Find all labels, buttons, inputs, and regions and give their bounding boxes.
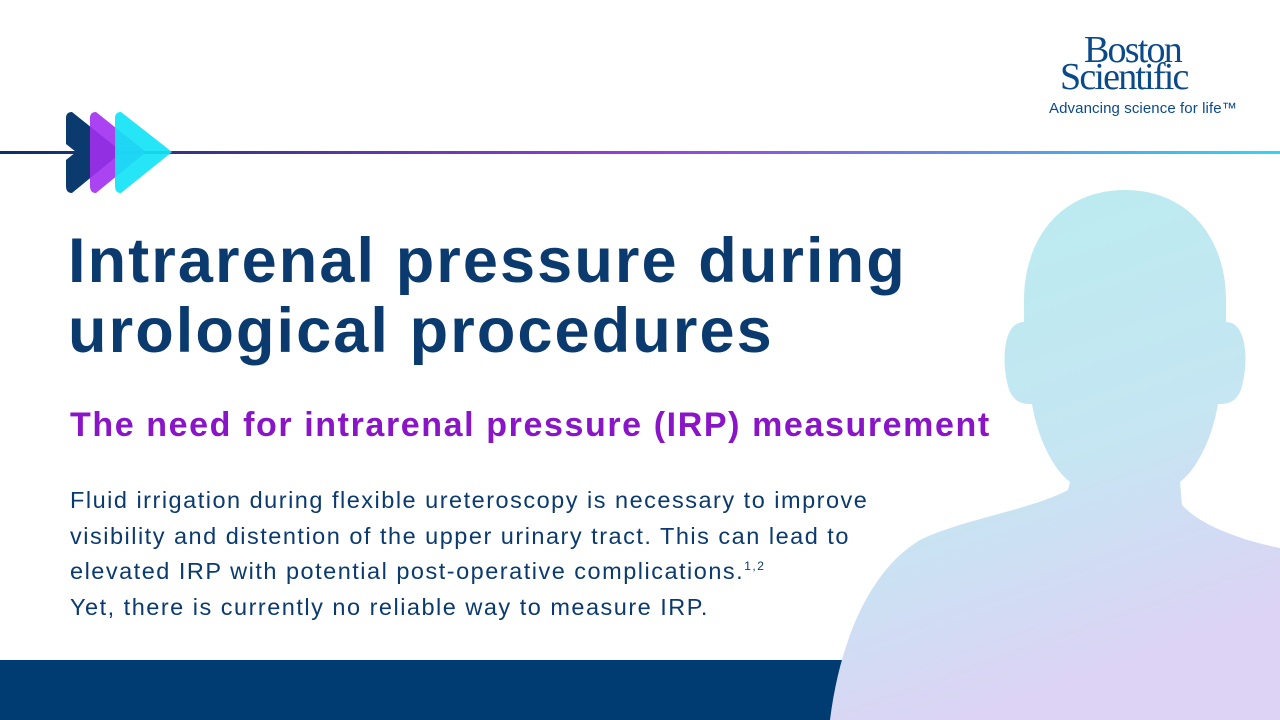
title: Intrarenal pressure during [68, 226, 907, 296]
body text: visibility and distention of the upper urinary tract. This can lead to [70, 522, 850, 548]
title [68, 226, 907, 366]
body text: Fluid irrigation during flexible ureteroscopy is necessary to improve [70, 487, 868, 513]
logo: Advancing science for life™ [1049, 100, 1237, 117]
body text [70, 487, 868, 620]
subtitle: The need for intrarenal pressure (IRP) measurement [70, 406, 991, 444]
title: urological procedures [68, 296, 774, 366]
body text: Yet, there is currently no reliable way to measure IRP. [70, 594, 709, 620]
logo [1049, 29, 1237, 117]
logo: Boston [1084, 29, 1181, 71]
logo: Scientific [1060, 56, 1188, 98]
icon: arrows [66, 112, 172, 193]
silhouette [830, 190, 1280, 720]
bottom bar [0, 660, 860, 720]
body text: elevated IRP with potential post-operative complications.1,2 [70, 558, 765, 584]
